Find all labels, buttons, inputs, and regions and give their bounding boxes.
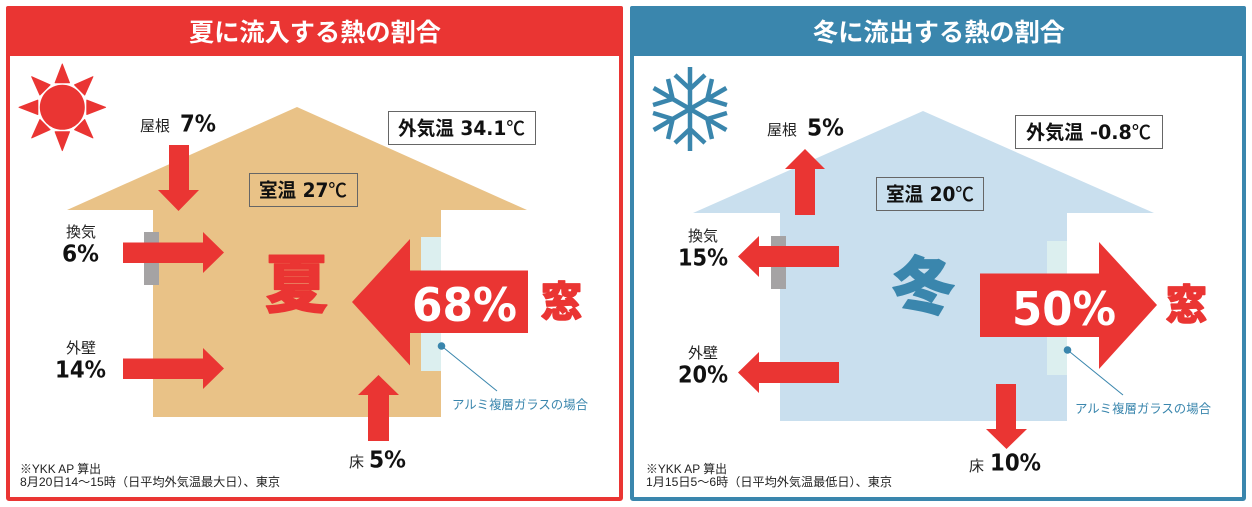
vent: winter <box>771 236 786 289</box>
winter heading: 冬に流出する熱の割合 <box>813 19 1065 47</box>
note: summer source: ※YKK AP 算出 <box>20 461 101 476</box>
note: summer source <box>20 461 280 489</box>
label: roof 5%: 屋根 <box>767 119 797 140</box>
arrow: window outflow 50% <box>980 242 1157 369</box>
winter panel frame <box>632 8 1244 499</box>
label: floor 5%: 床 <box>349 451 364 472</box>
arrow: window outflow 50%: 50% <box>1012 282 1116 336</box>
icon: sun <box>19 64 106 151</box>
note: winter source: ※YKK AP 算出 <box>646 461 727 476</box>
label: roof 7% <box>140 112 216 138</box>
callout: glass type winter: アルミ複層ガラスの場合 <box>1075 399 1212 417</box>
room temperature: summer: 室温 27℃ <box>259 174 347 203</box>
label: ventilation 6%: 換気 <box>66 221 96 242</box>
note: summer source: 8月20日14～15時（日平均外気温最大日）、東京 <box>20 474 280 489</box>
label: floor 5% <box>349 448 406 474</box>
label: roof 5%: 5% <box>807 116 844 142</box>
room temperature: winter: 室温 20℃ <box>886 178 974 207</box>
callout: glass type summer <box>438 342 589 413</box>
arrow: roof inflow <box>158 145 199 211</box>
arrow: window inflow 68%: 68% <box>412 278 517 332</box>
label: roof 7%: 屋根 <box>140 115 170 136</box>
note: winter source: 1月15日5～6時（日平均外気温最低日）、東京 <box>646 474 892 489</box>
outdoor temperature: winter: 外気温 -0.8℃ <box>1026 116 1151 145</box>
arrow: vent inflow <box>123 232 224 273</box>
callout: glass type winter <box>1064 346 1212 417</box>
label: wall 14%: 14% <box>55 358 106 384</box>
label: ventilation 15% <box>678 225 728 272</box>
arrow: floor inflow <box>358 375 399 441</box>
label: ventilation 15%: 換気 <box>688 225 718 246</box>
arrow: floor outflow <box>986 384 1027 449</box>
summer heading: 夏に流入する熱の割合 <box>189 19 441 47</box>
arrow: wall outflow <box>738 352 839 393</box>
winter heading <box>630 6 1246 56</box>
icon: snowflake <box>646 67 734 151</box>
outdoor temperature: summer: 外気温 34.1℃ <box>398 112 525 141</box>
label: floor 10%: 10% <box>990 450 1041 476</box>
window: winter <box>1047 241 1067 375</box>
label: roof 5% <box>767 116 844 142</box>
panel: summer <box>6 6 623 499</box>
season kanji: summer: 夏 <box>265 235 328 326</box>
arrow: roof outflow <box>785 149 825 215</box>
label: floor 5%: 5% <box>369 448 406 474</box>
summer heading <box>6 6 623 56</box>
season kanji: winter: 冬 <box>892 237 955 328</box>
arrow: window inflow 68% <box>352 239 528 366</box>
label: ventilation 6% <box>62 221 99 268</box>
house: winter <box>693 111 1154 421</box>
label: wall 20%: 20% <box>678 362 728 388</box>
label: ventilation 15%: 15% <box>678 246 728 272</box>
summer panel frame <box>8 8 621 499</box>
label: wall 14% <box>55 337 106 384</box>
window label: winter: 窓 <box>1166 271 1207 331</box>
label: wall 20% <box>678 342 728 388</box>
label: roof 7%: 7% <box>180 112 216 138</box>
window label: summer: 窓 <box>541 268 582 328</box>
house: summer <box>67 107 527 417</box>
arrow: vent outflow <box>738 236 839 277</box>
label: floor 10% <box>969 450 1041 476</box>
vent: summer <box>144 232 159 285</box>
callout: glass type summer: アルミ複層ガラスの場合 <box>452 395 589 413</box>
label: ventilation 6%: 6% <box>62 242 99 268</box>
note: winter source <box>646 461 892 489</box>
panel: winter <box>630 6 1246 499</box>
label: wall 14%: 外壁 <box>66 337 96 358</box>
label: wall 20%: 外壁 <box>688 342 718 363</box>
label: floor 10%: 床 <box>969 455 984 476</box>
window: summer <box>421 237 441 371</box>
arrow: wall inflow <box>123 348 224 389</box>
